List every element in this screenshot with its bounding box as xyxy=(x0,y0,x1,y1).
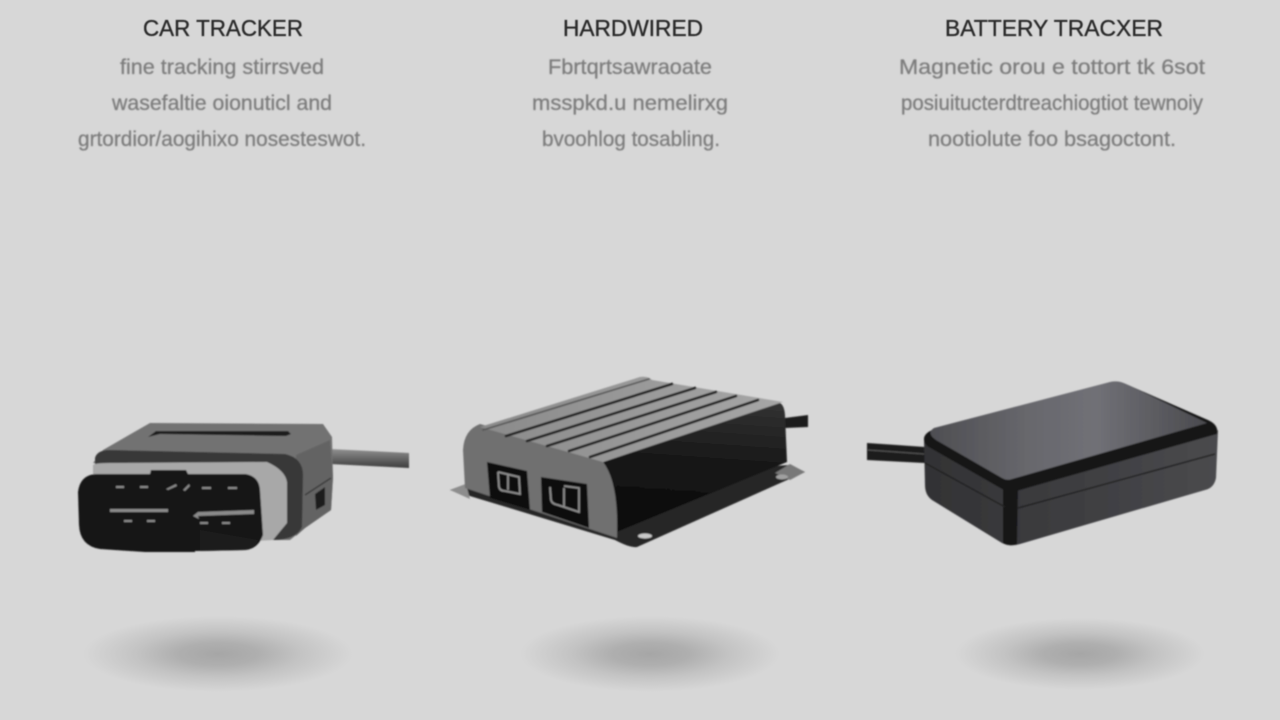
description: hardwired: msspkd.u nemelirxg xyxy=(532,92,728,115)
side clip xyxy=(315,487,325,510)
lid top xyxy=(930,381,1207,480)
cable xyxy=(867,443,925,463)
seam lines xyxy=(925,454,1215,508)
port 2 xyxy=(541,477,589,528)
right side xyxy=(603,402,787,532)
panel: battery tracker text xyxy=(899,15,1205,151)
description: car tracker xyxy=(78,56,366,151)
body sides xyxy=(924,430,1218,545)
light collar xyxy=(93,462,287,541)
heading: hardwired: HARDWIRED xyxy=(563,15,703,41)
heading: car tracker: CAR TRACKER xyxy=(143,15,303,41)
description: battery tracker: nootiolute foo bsagoctont. xyxy=(928,128,1176,151)
device: battery tracker xyxy=(867,381,1218,545)
cable xyxy=(330,449,409,468)
shadow: car tracker xyxy=(83,616,353,692)
housing top and side xyxy=(93,423,333,540)
cable xyxy=(785,415,808,428)
shadow: battery tracker xyxy=(955,618,1205,690)
device: OBD car tracker xyxy=(78,423,409,552)
panel: car tracker text xyxy=(78,15,366,151)
description: car tracker: wasefaltie oionuticl and xyxy=(111,92,332,115)
description: hardwired xyxy=(532,56,728,151)
shadow: hardwired xyxy=(520,616,780,692)
description: battery tracker xyxy=(899,56,1205,151)
top ribs xyxy=(483,379,758,457)
mounting flange xyxy=(450,465,805,547)
front corner xyxy=(1003,484,1018,545)
description: car tracker: grtordior/aogihixo nosesteswot. xyxy=(78,128,366,151)
connector face xyxy=(78,470,263,552)
description: car tracker: fine tracking stirrsved xyxy=(120,56,324,79)
description: battery tracker: posiuitucterdtreachiogtiot tewnoiy xyxy=(901,92,1203,115)
top slot xyxy=(148,431,291,437)
dark collar xyxy=(95,450,303,540)
top ribbed face xyxy=(480,377,783,462)
connector pins xyxy=(110,484,254,524)
description: hardwired: Fbrtqrtsawraoate xyxy=(548,56,712,79)
front face xyxy=(463,424,617,538)
side body xyxy=(296,440,333,536)
device: hardwired tracker xyxy=(450,377,808,547)
description: hardwired: bvoohlog tosabling. xyxy=(542,128,720,151)
lid edge xyxy=(924,382,1217,492)
heading: battery tracker: BATTERY TRACXER xyxy=(945,15,1163,41)
port 1 xyxy=(487,462,530,510)
panel: hardwired text xyxy=(532,15,728,151)
description: battery tracker: Magnetic orou e tottort tk 6sot xyxy=(899,56,1205,79)
